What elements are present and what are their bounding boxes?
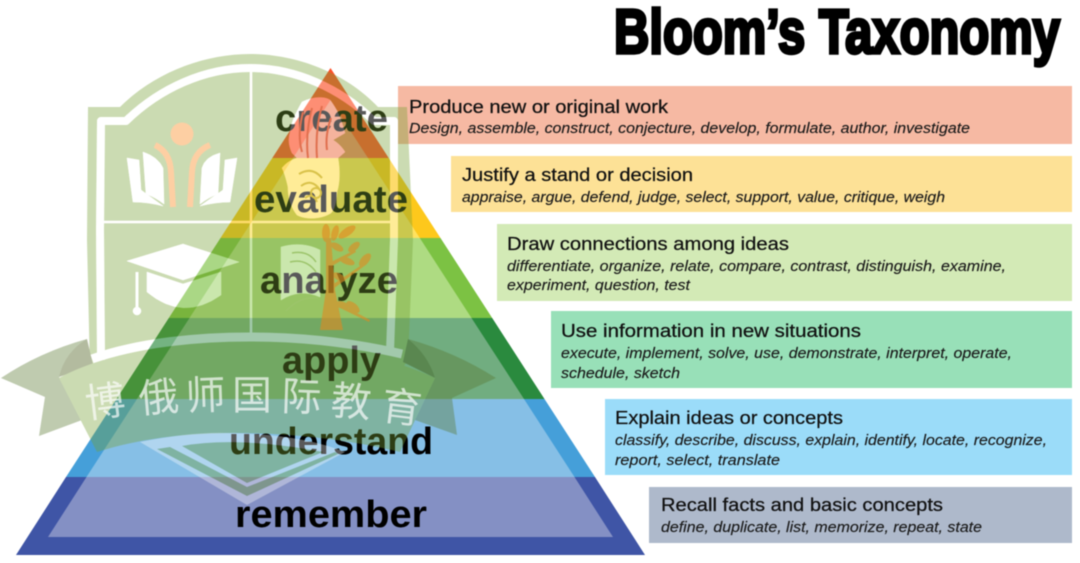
text: analyze: experiment, question, test <box>507 278 691 294</box>
shield tip stripe <box>157 447 338 496</box>
icon: merlion details <box>299 106 331 202</box>
text: create: Design, assemble, construct, conjecture, develop, formulate, author, investigate <box>409 121 970 137</box>
text: evaluate: Justify a stand or decision <box>462 164 693 185</box>
crest green areas and ribbon <box>1 54 496 496</box>
text: create <box>409 96 970 137</box>
pyramid labels <box>229 98 433 536</box>
label: analyze: analyze <box>260 260 398 302</box>
text: understand <box>615 407 1047 469</box>
pyramid level: understand <box>66 399 595 477</box>
label: remember: remember <box>235 494 427 536</box>
text: evaluate <box>462 164 945 206</box>
text: analyze <box>507 233 1006 294</box>
pyramid level: create <box>272 68 389 158</box>
text: apply: schedule, sketch <box>561 366 680 382</box>
ribbon band <box>59 342 435 452</box>
description boxes <box>398 86 1072 543</box>
watermark text: 博俄师国际教育 <box>83 374 424 433</box>
text: understand: report, select, translate <box>615 453 780 469</box>
label: understand: understand <box>229 421 433 463</box>
pyramid level: analyze <box>169 238 492 318</box>
watermark: school crest <box>1 54 496 505</box>
text: remember <box>661 494 982 536</box>
pyramid level: apply <box>116 318 544 399</box>
text: remember: define, duplicate, list, memorize, repeat, state <box>661 520 982 536</box>
box: create <box>398 86 1072 144</box>
crest shield <box>87 54 413 372</box>
pyramid <box>16 68 645 555</box>
text: apply: Use information in new situations <box>561 320 861 341</box>
label: apply: apply <box>282 340 381 382</box>
ribbon left fold <box>59 339 93 377</box>
text: remember: Recall facts and basic concepts <box>661 494 943 515</box>
text: create: Produce new or original work <box>409 96 669 117</box>
label: create: create <box>275 98 388 140</box>
box text <box>409 96 1047 536</box>
box: remember <box>649 487 1072 543</box>
text: analyze: Draw connections among ideas <box>507 233 789 254</box>
text: analyze: differentiate, organize, relate, compare, contrast, distinguish, examine, <box>507 259 1006 275</box>
pyramid level: evaluate <box>220 158 440 238</box>
icon: reader figure <box>155 122 210 207</box>
box: apply <box>551 311 1072 388</box>
label: evaluate: evaluate <box>254 179 408 221</box>
text: evaluate: appraise, argue, defend, judge, select, support, value, critique, weigh <box>462 190 945 206</box>
box: understand <box>605 399 1072 475</box>
text: understand: Explain ideas or concepts <box>615 407 843 428</box>
icon: tree <box>320 223 373 330</box>
crest white linework and icons <box>92 68 402 505</box>
ribbon right tail <box>408 339 496 435</box>
icon: book page lines <box>286 252 318 311</box>
pyramid level: remember <box>16 477 645 555</box>
shield tip interior <box>182 442 323 483</box>
ribbon left tail <box>1 339 87 436</box>
ribbon right fold <box>403 339 435 378</box>
text: understand: classify, describe, discuss, explain, identify, locate, recognize, <box>615 433 1047 449</box>
box: evaluate <box>451 156 1072 212</box>
text: apply: execute, implement, solve, use, demonstrate, interpret, operate, <box>561 346 1012 362</box>
box: analyze <box>497 224 1072 301</box>
text: apply <box>561 320 1012 382</box>
